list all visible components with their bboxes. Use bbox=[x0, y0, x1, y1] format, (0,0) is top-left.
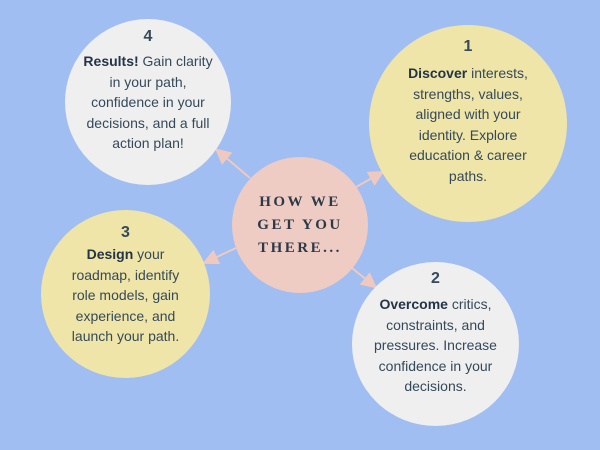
circle 3: design: Design your bbox=[87, 246, 164, 262]
circle 1: discover: Discover interests, bbox=[408, 65, 528, 81]
center circle: GET YOU bbox=[257, 216, 343, 232]
circle 1: discover: education & career bbox=[409, 147, 527, 163]
circle 2: overcome bbox=[352, 262, 519, 426]
circle 3: design: experience, and bbox=[76, 308, 175, 324]
circle 2: overcome: Overcome critics, bbox=[379, 296, 492, 312]
circle 2: overcome: 2 bbox=[431, 270, 440, 287]
circle 3: design: launch your path. bbox=[72, 328, 179, 344]
circle 4: results: 4 bbox=[144, 28, 152, 45]
circle 2: overcome: pressures. Increase bbox=[374, 337, 497, 353]
circle 2: overcome: confidence in your bbox=[379, 358, 492, 374]
circle 4: results: decisions, and a full bbox=[87, 114, 209, 130]
circle 3: design: roadmap, identify bbox=[72, 266, 179, 282]
circle 4: results: Results! Gain clarity bbox=[83, 53, 213, 69]
circle 1: discover: 1 bbox=[464, 38, 472, 55]
circle 1: discover bbox=[369, 25, 567, 222]
circle 4: results: confidence in your bbox=[91, 94, 205, 110]
circle 1: discover: aligned with your bbox=[415, 106, 521, 122]
center circle: HOW WE bbox=[259, 194, 341, 210]
circle 2: overcome: constraints, and bbox=[386, 316, 485, 332]
circle 2: overcome: decisions. bbox=[404, 378, 467, 394]
circle 4: results: action plan! bbox=[112, 135, 184, 151]
center circle: THERE... bbox=[258, 240, 342, 256]
circle 3: design: 3 bbox=[121, 224, 130, 241]
circle 3: design bbox=[41, 210, 210, 378]
circle 3: design: role models, gain bbox=[72, 287, 179, 303]
circle 1: discover: paths. bbox=[449, 168, 487, 184]
circle 1: discover: identity. Explore bbox=[419, 126, 517, 142]
center circle bbox=[232, 157, 368, 293]
circle 1: discover: strengths, values, bbox=[413, 86, 523, 102]
circle 4: results: in your path, bbox=[109, 74, 187, 90]
circle 4: results bbox=[65, 19, 231, 185]
